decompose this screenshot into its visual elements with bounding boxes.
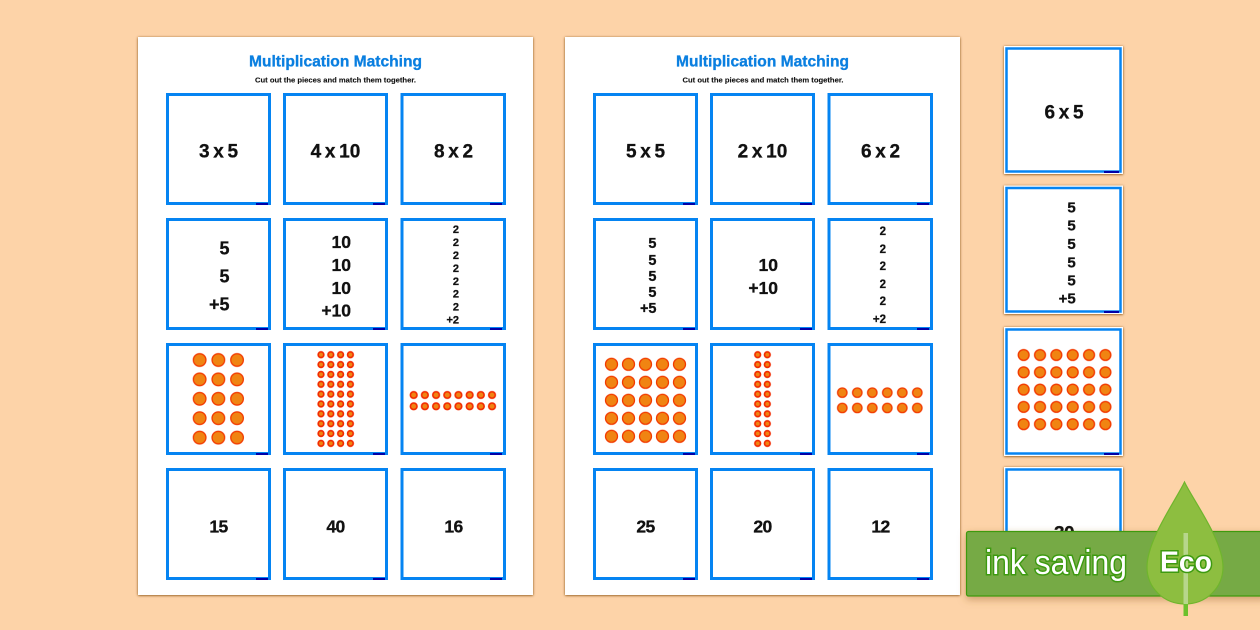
card: loose six fives sum: +5	[1059, 290, 1076, 307]
card: 4 x 10	[284, 94, 386, 204]
card: answer 20: 20	[753, 516, 772, 536]
card: 3 x 5: 3 x 5	[199, 142, 238, 162]
card: 3 by 5 dot array	[168, 344, 270, 454]
text: worksheet 1 instructions: Cut out the pieces and match them together.	[255, 76, 416, 84]
card: 8 x 2: 8 x 2	[434, 142, 473, 162]
card: loose six fives sum: 5	[1067, 199, 1076, 216]
card: 5 + 5 + 5 sum: 5	[219, 238, 230, 258]
card: five fives sum: 5	[648, 269, 656, 285]
card: eight twos sum: 2	[453, 237, 459, 249]
card: 4 x 10: 4 x 10	[311, 142, 360, 162]
text: ink saving: ink saving	[985, 544, 1127, 582]
card: four tens sum: +10	[321, 300, 351, 320]
card: loose six fives sum: 5	[1067, 272, 1076, 289]
card: 4 by 10 dot array	[284, 344, 386, 454]
card: loose 5 by 6 dot array	[1004, 327, 1123, 456]
card: six twos sum: 2	[880, 279, 886, 291]
heading: worksheet 2 title: Multiplication Matching	[676, 54, 849, 70]
card: 5 by 5 dot array	[594, 344, 696, 454]
card: eight twos sum: 2	[453, 250, 459, 262]
card: 2 x 10: 2 x 10	[738, 142, 787, 162]
card: eight twos sum: 2	[453, 263, 459, 275]
card: 2 x 10	[712, 94, 814, 204]
card: six twos sum: 2	[880, 244, 886, 256]
card: 6 by 2 dot array	[829, 344, 932, 454]
card: loose six fives sum: 5	[1067, 236, 1076, 253]
card: loose six fives sum: 5	[1067, 217, 1076, 234]
card: four tens sum: 10	[332, 232, 351, 252]
card: 5 + 5 + 5 sum: 5	[219, 266, 230, 286]
card: loose answer 30, partly hidden	[1004, 467, 1123, 587]
banner: ink saving	[966, 532, 1260, 596]
card: four tens sum	[284, 220, 386, 329]
card: five fives sum: 5	[648, 285, 656, 301]
card: eight twos sum: 2	[453, 276, 459, 288]
card: eight twos sum: 2	[453, 224, 459, 236]
card: answer 15: 15	[209, 516, 228, 536]
icon: eco leaf drop	[1147, 482, 1223, 616]
card: loose six fives sum	[1004, 186, 1123, 314]
card: 2 by 10 dot array	[712, 344, 814, 454]
card: loose 6 x 5	[1004, 46, 1123, 174]
card: five fives sum: +5	[640, 301, 656, 317]
card: 6 x 2	[829, 94, 932, 204]
card: six twos sum	[829, 220, 932, 329]
card: 3 x 5	[168, 94, 270, 204]
card: answer 16	[402, 470, 504, 579]
card: answer 25	[594, 470, 696, 579]
card: six twos sum: +2	[873, 314, 886, 326]
card: six twos sum: 2	[880, 226, 886, 238]
card: six twos sum: 2	[880, 261, 886, 273]
card: 6 x 2: 6 x 2	[861, 142, 900, 162]
card: 5 x 5: 5 x 5	[626, 142, 665, 162]
card: two tens sum: +10	[748, 278, 778, 298]
text: Eco: Eco	[1160, 546, 1212, 578]
card: five fives sum	[594, 220, 696, 329]
card: loose 6 x 5: 6 x 5	[1044, 102, 1084, 124]
text: worksheet 2 instructions: Cut out the pieces and match them together.	[682, 76, 844, 84]
panel: worksheet 2	[565, 37, 960, 595]
card: answer 25: 25	[636, 516, 655, 536]
card: 8 by 2 dot array	[402, 344, 504, 454]
card: answer 12: 12	[871, 516, 890, 536]
card: two tens sum	[712, 220, 814, 329]
card: answer 15	[168, 470, 270, 579]
card: six twos sum: 2	[880, 296, 886, 308]
card: five fives sum: 5	[648, 236, 656, 252]
card: five fives sum: 5	[648, 253, 656, 269]
card: four tens sum: 10	[332, 255, 351, 275]
card: answer 12	[829, 470, 932, 579]
card: four tens sum: 10	[332, 278, 351, 298]
card: eight twos sum	[402, 220, 504, 329]
card: answer 40: 40	[326, 516, 345, 536]
card: loose six fives sum: 5	[1067, 254, 1076, 271]
heading: worksheet 1 title: Multiplication Matching	[249, 54, 422, 70]
card: 5 + 5 + 5 sum	[168, 220, 270, 329]
card: loose answer 30, partly hidden: 30	[1054, 524, 1074, 544]
card: eight twos sum: +2	[446, 314, 459, 326]
card: 5 x 5	[594, 94, 696, 204]
card: two tens sum: 10	[759, 255, 778, 275]
panel: worksheet 1	[138, 37, 533, 595]
card: answer 16: 16	[444, 516, 463, 536]
card: 8 x 2	[402, 94, 504, 204]
card: 5 + 5 + 5 sum: +5	[209, 294, 230, 314]
card: eight twos sum: 2	[453, 302, 459, 314]
card: answer 20	[712, 470, 814, 579]
card: eight twos sum: 2	[453, 288, 459, 300]
card: answer 40	[284, 470, 386, 579]
